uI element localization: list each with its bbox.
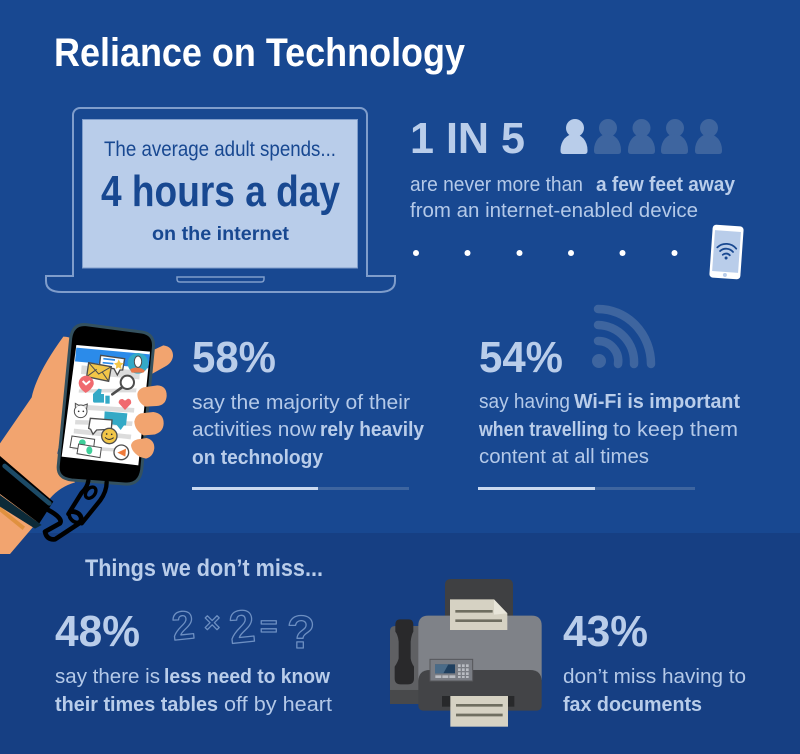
cuff shadow strip bbox=[0, 507, 25, 530]
play button bbox=[114, 445, 129, 460]
tray slot bbox=[443, 619, 515, 629]
illustration: fax machine bbox=[390, 579, 542, 727]
output slot bbox=[442, 696, 514, 707]
icon: outlined sum 2x2=?: = bbox=[260, 610, 278, 643]
cuff highlight bbox=[5, 466, 49, 503]
blue chat bubble bbox=[104, 411, 127, 430]
stat: 48%: 48% bbox=[55, 607, 140, 656]
handset base bbox=[390, 626, 423, 704]
stat: 43%: 43% bbox=[563, 607, 648, 656]
stat: 58%: activities now bbox=[192, 419, 317, 441]
stat: 54%: say having bbox=[479, 391, 570, 413]
cuff bbox=[0, 456, 53, 523]
location heart bbox=[79, 376, 94, 393]
magnifier bbox=[121, 376, 134, 389]
icon: outlined sum 2x2=?: 2 bbox=[170, 603, 197, 649]
person bbox=[661, 119, 688, 154]
text: few feet away: from an internet-enabled device bbox=[410, 200, 698, 222]
envelope bbox=[87, 363, 111, 381]
stat: 48%: less need to know bbox=[164, 666, 330, 688]
stat: 54%: when travelling bbox=[478, 419, 608, 441]
stat: 48%: say there is bbox=[55, 666, 160, 688]
phone screen bbox=[62, 345, 150, 465]
person bbox=[594, 119, 621, 154]
stat: 43%: fax documents bbox=[563, 694, 702, 716]
paper tray bbox=[445, 579, 513, 620]
icon row: five people bbox=[560, 119, 722, 154]
person bbox=[628, 119, 655, 154]
laptop screen bbox=[82, 120, 358, 268]
cuff teal edge bbox=[0, 495, 42, 529]
heading: things we don't miss: Things we don’t miss... bbox=[85, 555, 323, 582]
laptop notch bbox=[177, 277, 264, 282]
outgoing paper bbox=[450, 696, 508, 727]
stat: 58% bbox=[192, 333, 425, 490]
laptop text: the average adult: The average adult spends... bbox=[104, 138, 336, 161]
progress bar 58% bbox=[192, 487, 409, 490]
stat: 58%: say the majority of their bbox=[192, 392, 410, 414]
panel: bottom things we don't miss bbox=[0, 533, 800, 754]
heart bbox=[119, 399, 131, 410]
dotted connection bbox=[413, 250, 678, 256]
progress bar 54% bbox=[478, 487, 695, 490]
thumbs up bbox=[93, 389, 104, 403]
stat: 43%: don’t miss having to bbox=[563, 666, 746, 688]
stat: 54%: to keep them bbox=[613, 419, 738, 441]
icon: wifi bbox=[596, 309, 651, 364]
title: Reliance on Technology bbox=[54, 31, 466, 75]
stat: 58%: 58% bbox=[192, 333, 276, 382]
laptop outline bbox=[46, 108, 395, 292]
icon: outlined sum 2x2=?: × bbox=[204, 607, 220, 638]
stat: 54%: Wi-Fi is important bbox=[574, 391, 740, 413]
icon: outlined sum 2x2=?: 2 bbox=[226, 599, 257, 654]
person highlighted bbox=[560, 119, 588, 154]
cat bbox=[74, 405, 87, 418]
thumb side finger behind phone bbox=[150, 345, 173, 375]
stat: 54% bbox=[478, 333, 740, 490]
fax body bbox=[418, 616, 542, 680]
stat: 1 in 5: 1 IN 5 bbox=[410, 114, 525, 163]
phone body bbox=[58, 325, 154, 484]
stat: 58%: on technology bbox=[192, 447, 324, 469]
avatar bbox=[128, 353, 148, 374]
stat: 48% bbox=[55, 607, 332, 716]
icon: outlined sum 2x2=?: ? bbox=[287, 606, 315, 658]
laptop text: 4 hours a day: 4 hours a day bbox=[101, 167, 340, 216]
text: few feet away bbox=[410, 174, 736, 222]
laptop with stat bbox=[46, 108, 395, 292]
text: few feet away: a few feet away bbox=[596, 174, 736, 196]
speech note with star bbox=[99, 355, 125, 375]
person bbox=[695, 119, 722, 154]
control panel bbox=[430, 659, 473, 681]
fax lower body bbox=[418, 670, 542, 711]
handset bbox=[395, 619, 414, 684]
incoming paper bbox=[450, 599, 507, 630]
screen grey lines bbox=[72, 365, 140, 452]
stat: 48%: off by heart bbox=[224, 694, 332, 716]
stat: 54%: 54% bbox=[479, 333, 563, 382]
outlined chat bubble bbox=[89, 418, 112, 434]
laptop text: on the internet: on the internet bbox=[152, 224, 290, 245]
illustration: hand chained to phone bbox=[0, 325, 173, 554]
fingers bbox=[131, 385, 167, 459]
chain bbox=[45, 481, 107, 539]
icon: outlined sum 2x2=? bbox=[170, 599, 315, 658]
screen header bbox=[75, 348, 150, 368]
smiley bbox=[102, 428, 117, 444]
stat: 58%: rely heavily bbox=[320, 419, 425, 441]
text: few feet away: are never more than bbox=[410, 174, 583, 196]
stat: 48%: their times tables bbox=[55, 694, 218, 716]
icon: phone with wifi bbox=[709, 224, 744, 280]
stat: 43% bbox=[563, 607, 746, 716]
hand and arm bbox=[0, 337, 77, 554]
banknotes bbox=[70, 436, 95, 451]
stat: 54%: content at all times bbox=[479, 446, 649, 468]
